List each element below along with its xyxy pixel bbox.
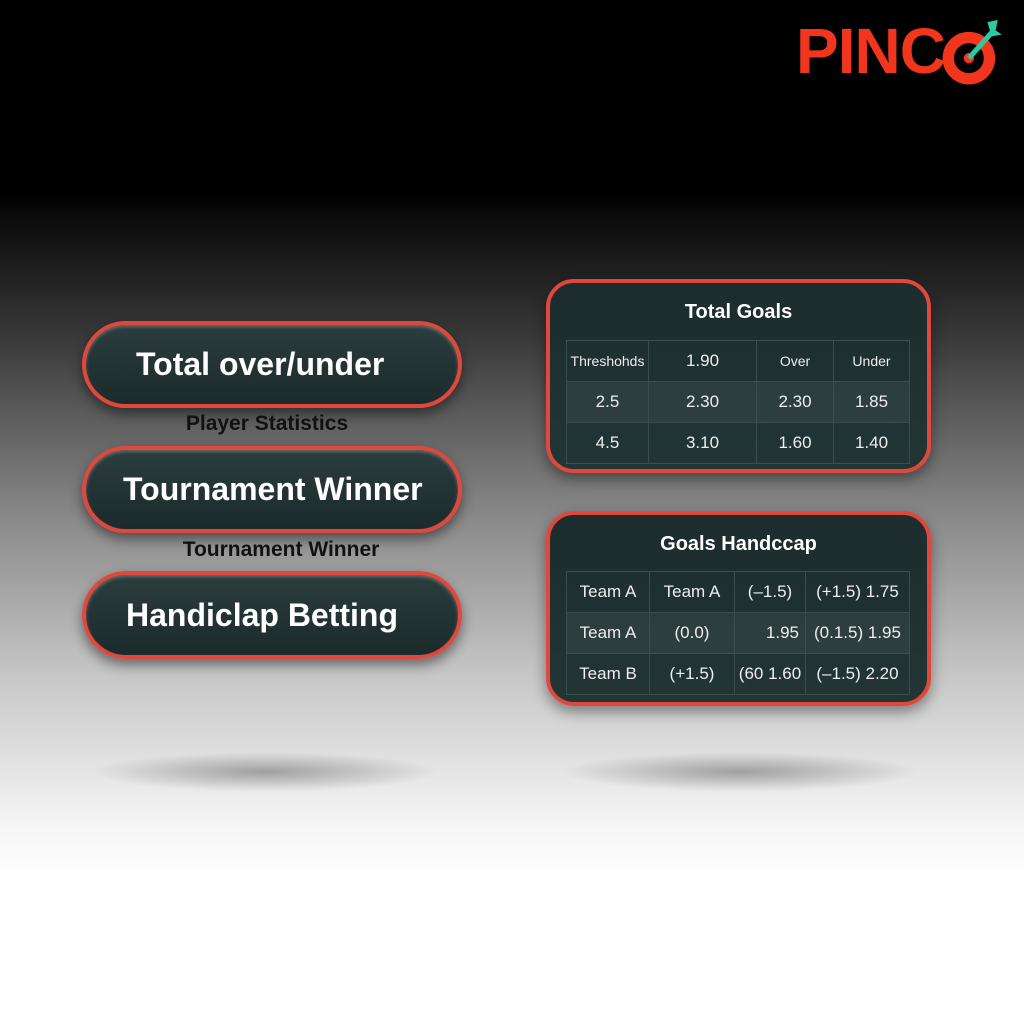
panel: Goals Handicap <box>546 511 931 706</box>
table: handicap: (–1.5) 2.20 <box>816 664 899 683</box>
shadows <box>90 752 440 792</box>
table: total goals: 2.5 <box>596 392 619 411</box>
table: handicap: (0.0) <box>675 623 709 642</box>
label: Tournament Winner: Tournament Winner <box>183 538 379 561</box>
table: total goals: 1.60 <box>778 433 812 452</box>
table: total goals <box>566 340 910 464</box>
logo: PINC <box>796 15 945 87</box>
pill: Handiclap Betting <box>82 571 462 659</box>
table: total goals: Threshohds <box>571 353 644 369</box>
table: total goals: 3.10 <box>686 433 719 452</box>
table: handicap: Team A <box>580 582 636 601</box>
table: handicap: (0.1.5) 1.95 <box>814 623 901 642</box>
table: handicap: Team A <box>580 623 636 642</box>
table: handicap: Team B <box>579 664 637 683</box>
table: handicap <box>566 571 910 695</box>
heading: Total Goals: Total Goals <box>685 301 792 323</box>
label: Player Statistics: Player Statistics <box>186 412 348 435</box>
table: total goals: 1.85 <box>855 392 888 411</box>
table: total goals: Over <box>780 353 810 369</box>
table: total goals: 1.40 <box>855 433 888 452</box>
table: handicap: 1.95 <box>766 623 799 642</box>
table: handicap: Team A <box>664 582 720 601</box>
table: total goals: 1.90 <box>686 351 719 370</box>
table: total goals: 2.30 <box>686 392 719 411</box>
table: handicap: (+1.5) <box>670 664 714 683</box>
pill: Tournament Winner: Tournament Winner <box>123 471 423 507</box>
table: handicap: (+1.5) 1.75 <box>816 582 899 601</box>
pill: Handiclap Betting: Handiclap Betting <box>126 596 398 632</box>
table: handicap: (60 1.60 <box>739 664 801 683</box>
pill: Tournament Winner <box>82 446 462 533</box>
pill: Total over/under: Total over/under <box>136 346 384 382</box>
table: total goals: Under <box>852 353 891 369</box>
table: total goals: 4.5 <box>596 433 619 452</box>
table: handicap: (–1.5) <box>748 582 792 601</box>
panel: Total Goals <box>546 279 931 473</box>
pill: Total over/under <box>82 321 462 408</box>
table: total goals: 2.30 <box>778 392 812 411</box>
heading: Goals Handccap: Goals Handccap <box>660 533 817 555</box>
